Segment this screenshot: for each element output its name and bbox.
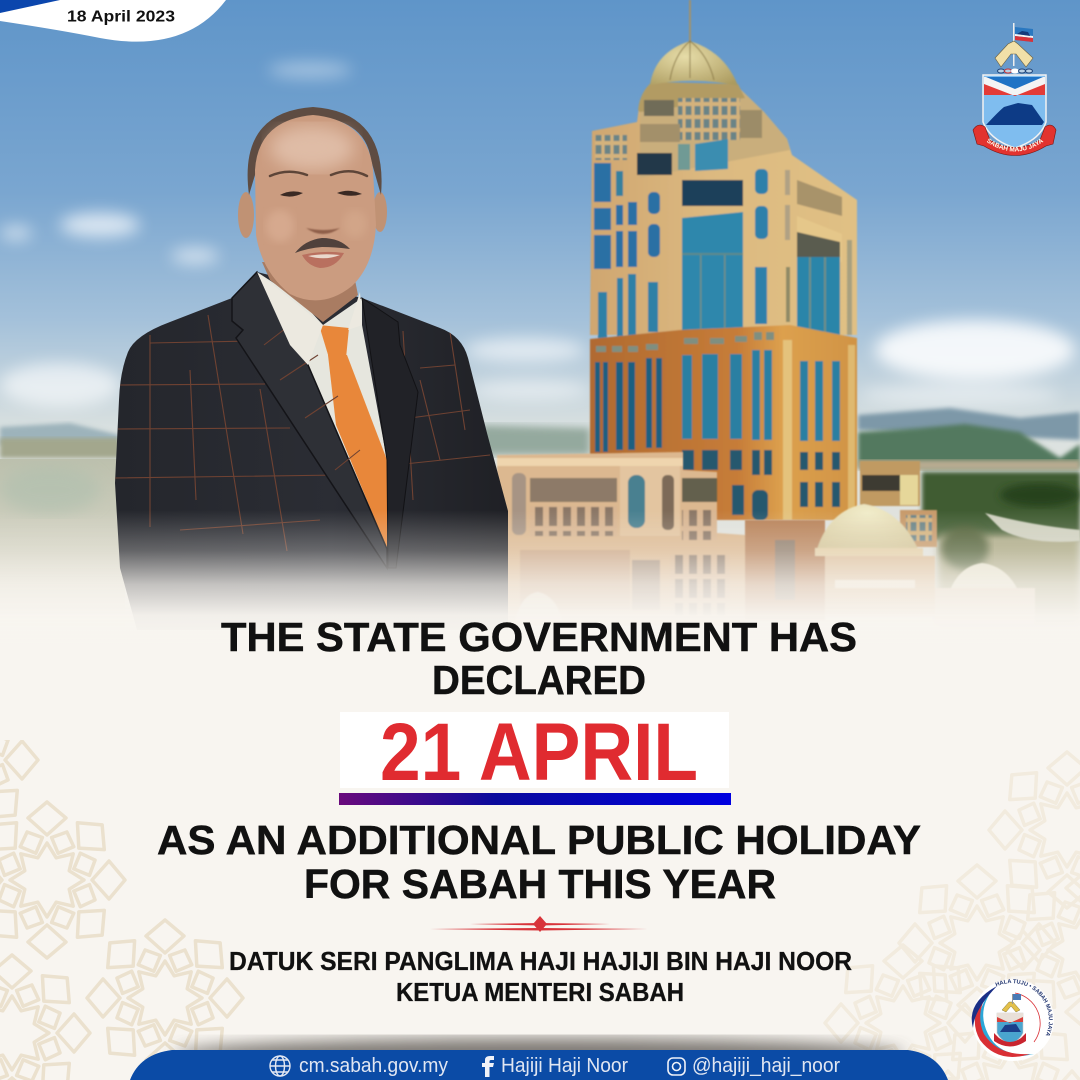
dome base bbox=[825, 556, 935, 616]
gradient underline bbox=[339, 793, 731, 805]
ears bbox=[238, 192, 254, 238]
lower tower bbox=[590, 325, 857, 520]
building: government tower bbox=[590, 0, 857, 520]
central glass bbox=[682, 212, 743, 330]
middle section bbox=[745, 520, 825, 620]
forest bbox=[922, 472, 1080, 540]
podium top trim bbox=[497, 458, 683, 466]
main statement heading: THE STATE GOVERNMENT HAS bbox=[221, 614, 857, 660]
podium windows bbox=[512, 473, 526, 535]
icon: globe bbox=[270, 1056, 290, 1076]
lapel plaid bbox=[264, 325, 360, 470]
shield chief bbox=[984, 77, 1045, 95]
right opening bbox=[797, 216, 842, 262]
tie bbox=[319, 325, 387, 549]
shirt bbox=[257, 272, 387, 552]
crown back levels bbox=[640, 86, 790, 178]
attribution: DATUK SERI PANGLIMA HAJI HAJIJI BIN HAJI NOOR bbox=[229, 946, 852, 976]
red crescent bbox=[975, 990, 1030, 1057]
attribution: KETUA MENTERI SABAH bbox=[396, 977, 684, 1007]
face bbox=[255, 115, 376, 300]
lower glass panels bbox=[595, 358, 662, 452]
background: sky bbox=[0, 0, 1080, 640]
left water bbox=[0, 459, 125, 629]
arms holding flag bbox=[995, 41, 1033, 67]
pale columns bbox=[783, 340, 792, 520]
dome ribs bbox=[670, 41, 714, 80]
centre water and hills behind podium bbox=[480, 425, 590, 455]
left distant hills and shore bbox=[0, 423, 120, 445]
statement continuation bbox=[157, 817, 921, 907]
right green hill bbox=[858, 424, 1080, 468]
moustache bbox=[295, 238, 350, 253]
blue crescent bbox=[972, 986, 997, 1028]
icon: facebook bbox=[482, 1056, 494, 1077]
decorative pattern: geometric corners bbox=[0, 740, 1080, 1080]
right mountains bbox=[858, 408, 1080, 440]
white box bbox=[340, 712, 729, 788]
brows bbox=[270, 171, 367, 176]
collar bbox=[257, 272, 323, 365]
mini crest bbox=[1002, 1002, 1020, 1012]
date highlight box bbox=[339, 707, 731, 805]
tree group bbox=[941, 526, 989, 570]
small dome left bbox=[515, 592, 562, 620]
shield bbox=[983, 75, 1046, 148]
logo: Hala Tuju Sabah Maju Jaya bbox=[972, 979, 1054, 1061]
floor windows row bbox=[596, 332, 774, 352]
logo disc bbox=[972, 979, 1054, 1061]
mini shield bbox=[997, 1013, 1023, 1044]
river bbox=[985, 513, 1080, 542]
instagram handle: @hajiji_haji_noor bbox=[692, 1055, 840, 1077]
cheek highlight bbox=[266, 210, 294, 242]
facebook name: Hajiji Haji Noor bbox=[501, 1055, 628, 1077]
forehead highlight bbox=[270, 126, 354, 170]
website: cm.sabah.gov.my bbox=[299, 1055, 448, 1077]
cyan crescent bbox=[979, 988, 1034, 1056]
lips bbox=[302, 252, 344, 268]
mini ribbon bbox=[994, 1033, 1026, 1046]
inner red arc bbox=[1015, 993, 1040, 1042]
land bbox=[938, 535, 1080, 625]
attribution bbox=[229, 946, 852, 1007]
motto ribbon: SABAH MAJU JAYA bbox=[987, 138, 1044, 152]
upper body bbox=[590, 86, 857, 335]
emblem: Sabah coat of arms bbox=[972, 23, 1056, 156]
ornament divider bbox=[430, 916, 648, 932]
flag bbox=[1013, 23, 1033, 66]
right top band bbox=[797, 180, 842, 216]
footer shadow bbox=[175, 1038, 905, 1070]
spire bbox=[689, 0, 691, 42]
left mid glass bbox=[598, 274, 658, 339]
dome ring bbox=[638, 82, 745, 112]
statement continuation: AS AN ADDITIONAL PUBLIC HOLIDAY bbox=[157, 817, 921, 863]
main statement heading bbox=[221, 614, 857, 703]
central-right glass bbox=[755, 169, 768, 324]
large dome bbox=[817, 504, 918, 549]
footer background bbox=[130, 1050, 948, 1080]
date text: 21 APRIL bbox=[380, 707, 698, 798]
portrait: man in suit bbox=[115, 107, 508, 630]
right lapel bbox=[362, 298, 418, 568]
suit jacket bbox=[115, 272, 508, 630]
eyes bbox=[280, 191, 362, 197]
nose shade bbox=[306, 228, 340, 234]
top-left date tab bbox=[0, 0, 226, 42]
icon: instagram bbox=[668, 1058, 685, 1075]
main statement heading: DECLARED bbox=[432, 657, 646, 703]
suit plaid bbox=[115, 315, 490, 551]
crown windows bbox=[595, 135, 627, 160]
town strip bbox=[858, 460, 1080, 470]
building: podium and domes bbox=[497, 452, 1035, 625]
footer bar bbox=[130, 1050, 948, 1080]
base windows bbox=[682, 450, 840, 520]
right podium bbox=[860, 461, 920, 506]
dome ring bbox=[815, 548, 923, 556]
hair bbox=[248, 107, 382, 195]
rings bbox=[998, 69, 1032, 73]
mountain bbox=[986, 103, 1044, 125]
dome bbox=[650, 41, 738, 86]
left lapel bbox=[232, 272, 387, 568]
central dark strip bbox=[682, 180, 743, 206]
tab blue accent bbox=[0, 0, 60, 13]
small dome right bbox=[950, 563, 1018, 590]
left podium bbox=[497, 452, 745, 625]
statement continuation: FOR SABAH THIS YEAR bbox=[304, 861, 776, 907]
date: 18 April 2023 bbox=[67, 8, 175, 26]
ring text: HALA TUJU • SABAH MAJU JAYA bbox=[995, 979, 1053, 1036]
background: cream fade bbox=[0, 510, 1080, 645]
clouds bbox=[0, 62, 1075, 407]
left upper glass bbox=[594, 163, 660, 269]
tab white shape bbox=[0, 0, 226, 42]
landscape: hills, water and forest bbox=[0, 408, 1080, 629]
neck shade bbox=[262, 262, 358, 322]
